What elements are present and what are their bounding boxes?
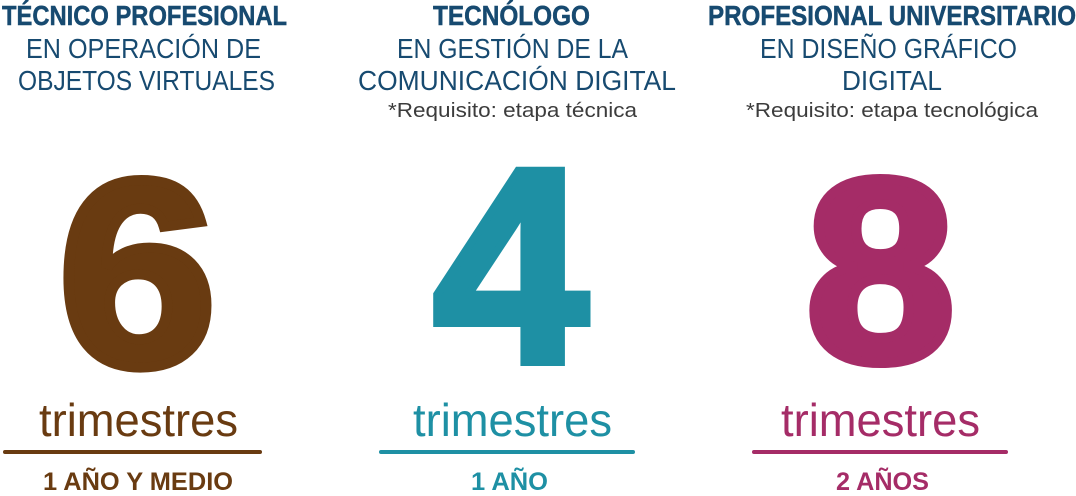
duration: 1 año: 1 AÑO (471, 466, 548, 496)
duration: 2 años: 2 AÑOS (836, 466, 929, 496)
label: trimestres: trimestres (39, 394, 238, 446)
heading: tecnólogo: TECNÓLOGO (433, 0, 590, 31)
column: tecnólogo (358, 0, 676, 496)
subtitle line: comunicación digital: COMUNICACIÓN DIGITAL (358, 65, 676, 96)
label: trimestres: trimestres (781, 394, 980, 446)
divider line (379, 450, 635, 454)
duration: 1 año y medio: 1 AÑO Y MEDIO (43, 466, 233, 496)
subtitle line: en gestión de la: EN GESTIÓN DE LA (397, 33, 628, 64)
subtitle line: en diseño gráfico: EN DISEÑO GRÁFICO (760, 33, 1017, 64)
requirement note: *Requisito: etapa técnica (388, 99, 638, 122)
heading: técnico profesional: TÉCNICO PROFESIONAL (2, 0, 287, 31)
subtitle line: objetos virtuales: OBJETOS VIRTUALES (18, 65, 275, 96)
column: técnico profesional (2, 0, 287, 496)
subtitle line: digital: DIGITAL (842, 65, 942, 96)
big number 8: 8 (806, 126, 955, 416)
column: profesional universitario (708, 0, 1076, 496)
divider line (3, 450, 262, 454)
requirement note: *Requisito: etapa tecnológica (746, 99, 1039, 122)
subtitle line: en operación de: EN OPERACIÓN DE (26, 33, 261, 64)
big number 6: 6 (58, 126, 216, 422)
label: trimestres: trimestres (413, 394, 612, 446)
divider line (752, 450, 1008, 454)
big number 4: 4 (433, 110, 590, 421)
